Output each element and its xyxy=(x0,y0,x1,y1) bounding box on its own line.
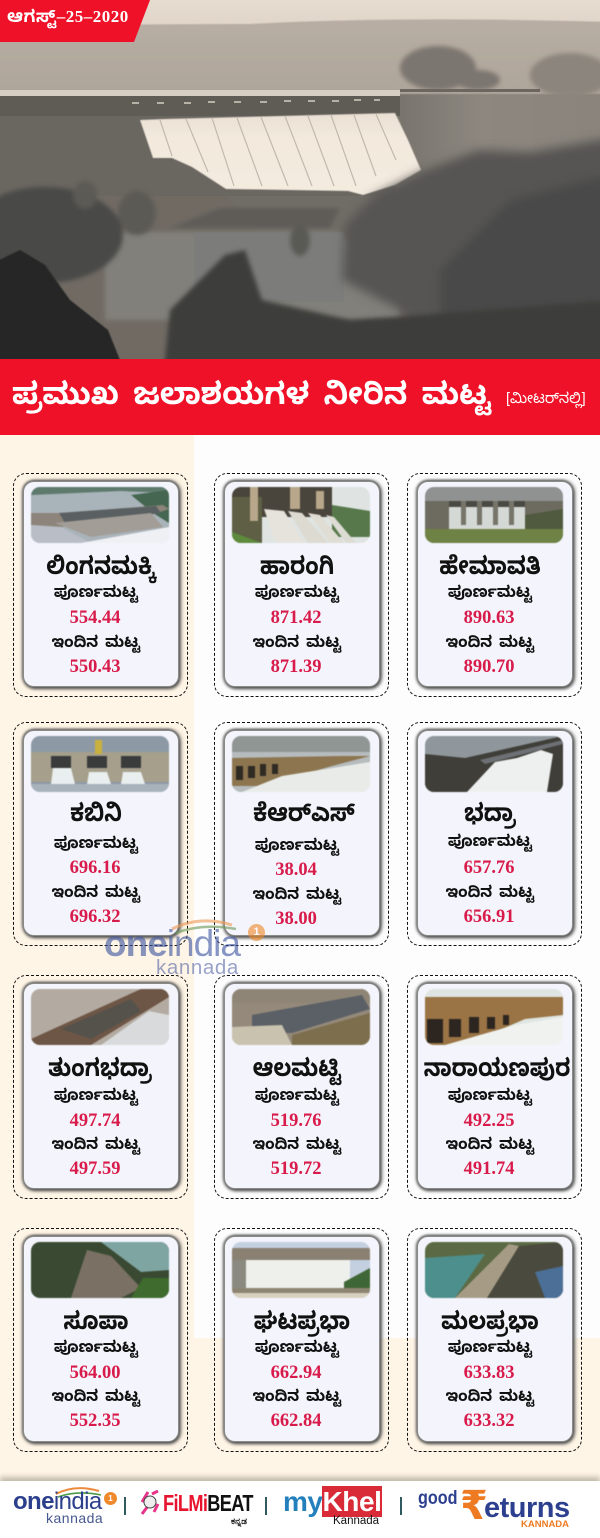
today's level label: ಇಂದಿನ ಮಟ್ಟ xyxy=(446,1136,534,1153)
full level label: ಪೂರ್ಣಮಟ್ಟ xyxy=(54,1087,138,1104)
today's level value: 491.74 xyxy=(464,1159,514,1179)
full level label: ಪೂರ್ಣಮಟ್ಟ xyxy=(54,835,138,852)
photo xyxy=(424,1241,564,1299)
dam name: ಕಬಿನಿ xyxy=(70,798,122,826)
full level value: 657.76 xyxy=(464,858,514,878)
full level label: ಪೂರ್ಣಮಟ್ಟ xyxy=(255,1087,339,1104)
full level value: 519.76 xyxy=(271,1111,321,1131)
card: KRS xyxy=(214,722,389,946)
full level label: ಪೂರ್ಣಮಟ್ಟ xyxy=(255,837,339,854)
dam name: ಮಲಪ್ರಭಾ xyxy=(441,1306,539,1334)
card: Linganamakki xyxy=(13,473,188,697)
full level value: 497.74 xyxy=(70,1111,120,1131)
rupee mark: ₹ xyxy=(460,1483,488,1529)
today's level value: 656.91 xyxy=(464,907,514,927)
today's level label: ಇಂದಿನ ಮಟ್ಟ xyxy=(253,886,341,903)
card: Tungabhadra xyxy=(13,975,188,1199)
watermark wordmark: oneindia xyxy=(104,923,240,964)
today's level value: 696.32 xyxy=(70,907,120,927)
full level value: 696.16 xyxy=(70,858,120,878)
full level value: 890.63 xyxy=(464,608,514,628)
logo badge xyxy=(104,1492,117,1505)
card: Kabini xyxy=(13,722,188,946)
card: Hemavathi xyxy=(407,473,582,697)
logo: goodreturns xyxy=(418,1483,570,1530)
title text: ಪ್ರಮುಖ ಜಲಾಶಯಗಳ ನೀರಿನ ಮಟ್ಟ xyxy=(12,377,491,411)
full level value: 871.42 xyxy=(271,608,321,628)
photo xyxy=(231,486,371,544)
today's level value: 662.84 xyxy=(271,1411,321,1431)
full level value: 662.94 xyxy=(271,1363,321,1383)
background: cream left column xyxy=(0,435,194,1340)
watermark badge xyxy=(248,924,265,941)
full level value: 564.00 xyxy=(70,1363,120,1383)
watermark badge: 1 xyxy=(253,926,260,938)
dam name: ನಾರಾಯಣಪುರ xyxy=(424,1053,570,1081)
today's level value: 552.35 xyxy=(70,1411,120,1431)
dam name: ಹಾರಂಗಿ xyxy=(260,551,334,579)
logo kannada text: kannada xyxy=(46,1510,103,1526)
logo: filmibeat xyxy=(140,1490,254,1527)
full level value: 554.44 xyxy=(70,608,120,628)
today's level label: ಇಂದಿನ ಮಟ್ಟ xyxy=(52,1136,140,1153)
mykhel wordmark: myKhel xyxy=(283,1486,382,1517)
card: Bhadra xyxy=(407,722,582,946)
eturns: eturns xyxy=(484,1492,570,1524)
card: Harangi xyxy=(214,473,389,697)
card: Almatti xyxy=(214,975,389,1199)
dam name: ಭದ್ರಾ xyxy=(464,798,516,826)
today's level label: ಇಂದಿನ ಮಟ್ಟ xyxy=(52,634,140,651)
header photo: dam with spillway in mist xyxy=(0,0,600,359)
separator xyxy=(124,1497,126,1515)
full level label: ಪೂರ್ಣಮಟ್ಟ xyxy=(54,1339,138,1356)
dam name: ಹೇಮಾವತಿ xyxy=(439,551,541,579)
filmibeat kannada text: ಕನ್ನಡ xyxy=(231,1516,247,1526)
date badge xyxy=(0,0,150,42)
mykhel kannada text: Kannada xyxy=(333,1515,379,1527)
full level label: ಪೂರ್ಣಮಟ್ಟ xyxy=(448,1087,532,1104)
today's level value: 550.43 xyxy=(70,657,120,677)
logo badge: 1 xyxy=(108,1494,113,1503)
full level value: 492.25 xyxy=(464,1111,514,1131)
dam name: ಸೂಪಾ xyxy=(63,1306,129,1334)
full level label: ಪೂರ್ಣಮಟ್ಟ xyxy=(255,1339,339,1356)
filmibeat wordmark: FiLMiBEAT xyxy=(163,1490,253,1516)
today's level label: ಇಂದಿನ ಮಟ್ಟ xyxy=(446,1388,534,1405)
logo: mykhel xyxy=(283,1486,382,1527)
today's level label: ಇಂದಿನ ಮಟ್ಟ xyxy=(446,884,534,901)
today's level label: ಇಂದಿನ ಮಟ್ಟ xyxy=(253,634,341,651)
today's level value: 890.70 xyxy=(464,657,514,677)
good: good xyxy=(418,1488,457,1509)
today's level value: 871.39 xyxy=(271,657,321,677)
full level value: 633.83 xyxy=(464,1363,514,1383)
photo xyxy=(231,1242,371,1298)
watermark kannada text: kannada xyxy=(156,956,239,979)
title banner xyxy=(0,359,600,435)
photo xyxy=(231,988,371,1046)
full level label: ಪೂರ್ಣಮಟ್ಟ xyxy=(448,1339,532,1356)
card: Malaprabha xyxy=(407,1228,582,1452)
today's level label: ಇಂದಿನ ಮಟ್ಟ xyxy=(253,1388,341,1405)
dam name: ಆಲಮಟ್ಟಿ xyxy=(253,1053,341,1081)
dam name: ಘಟಪ್ರಭಾ xyxy=(254,1306,350,1334)
full level label: ಪೂರ್ಣಮಟ್ಟ xyxy=(54,584,138,601)
today's level label: ಇಂದಿನ ಮಟ್ಟ xyxy=(52,1388,140,1405)
dam name: ಲಿಂಗನಮಕ್ಕಿ xyxy=(46,551,156,579)
card: Ghataprabha xyxy=(214,1228,389,1452)
unit note: [ಮೀಟರ್‌ನಲ್ಲಿ] xyxy=(506,391,586,407)
background: cream lower band xyxy=(0,1338,600,1481)
watermark swoosh xyxy=(171,919,236,934)
full level label: ಪೂರ್ಣಮಟ್ಟ xyxy=(448,833,532,850)
today's level label: ಇಂದಿನ ಮಟ್ಟ xyxy=(52,884,140,901)
card: Supa xyxy=(13,1228,188,1452)
logo wordmark: oneindia xyxy=(13,1488,102,1515)
dam name: ಕೆಆರ್‌ಎಸ್ xyxy=(253,798,355,826)
today's level value: 38.00 xyxy=(275,909,317,929)
dam name: ತುಂಗಭದ್ರಾ xyxy=(48,1053,152,1081)
photo xyxy=(424,988,564,1046)
date text: ಆಗಸ್ಟ್–25–2020 xyxy=(7,7,129,26)
logo: oneindia kannada xyxy=(13,1487,117,1526)
footer xyxy=(0,1481,600,1538)
today's level label: ಇಂದಿನ ಮಟ್ಟ xyxy=(253,1136,341,1153)
kannada text: KANNADA xyxy=(521,1519,569,1530)
card: Narayanapura xyxy=(407,975,582,1199)
photo xyxy=(424,486,564,544)
full level label: ಪೂರ್ಣಮಟ್ಟ xyxy=(448,584,532,601)
filmibeat icon xyxy=(140,1490,160,1515)
photo xyxy=(30,735,170,792)
today's level label: ಇಂದಿನ ಮಟ್ಟ xyxy=(446,634,534,651)
separator xyxy=(400,1497,402,1515)
photo xyxy=(30,988,170,1046)
photo xyxy=(424,735,564,793)
full level value: 38.04 xyxy=(275,860,317,880)
full level label: ಪೂರ್ಣಮಟ್ಟ xyxy=(255,584,339,601)
photo xyxy=(30,1241,170,1299)
photo xyxy=(30,486,170,544)
photo xyxy=(231,735,371,792)
today's level value: 633.32 xyxy=(464,1411,514,1431)
today's level value: 519.72 xyxy=(271,1159,321,1179)
today's level value: 497.59 xyxy=(70,1159,120,1179)
separator xyxy=(265,1497,267,1515)
logo swoosh xyxy=(56,1487,102,1498)
watermark: oneindia kannada logo xyxy=(104,919,265,979)
